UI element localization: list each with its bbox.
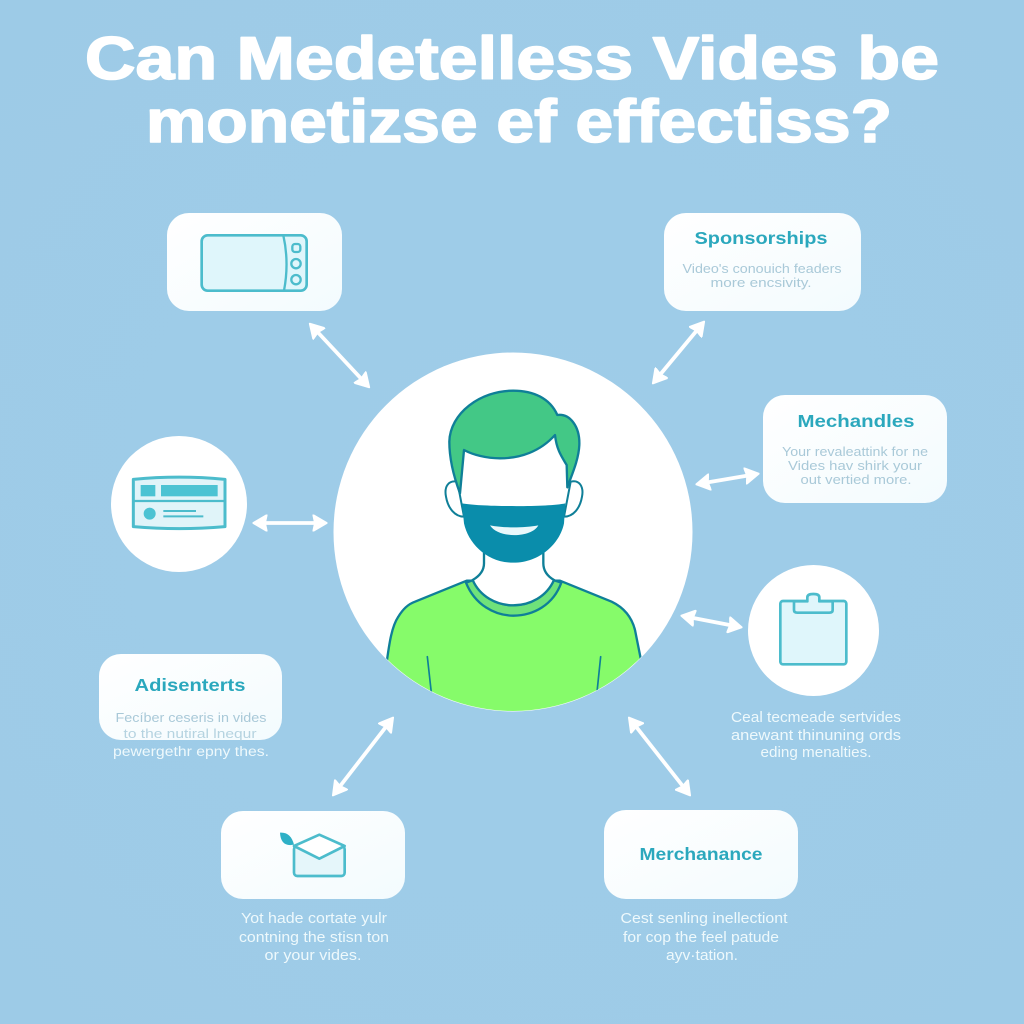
panel: envelope card (221, 811, 405, 899)
text: envelope caption: or your vides. (264, 948, 362, 964)
panel: adisenterts card (99, 654, 282, 759)
infographic canvas (86, 34, 947, 963)
arrow: right upper (698, 474, 757, 484)
text: merchanance caption: ayv·tation. (666, 948, 738, 964)
arrow: bottom-right (630, 719, 689, 794)
text: adisenterts description: pewergethr epny thes. (113, 744, 269, 759)
text: mechandles description: Vides hav shirk your (788, 458, 923, 473)
text: adisenterts description (113, 710, 269, 759)
heading: sponsorships: Sponsorships (694, 228, 828, 248)
heading: mechandles: Mechandles (798, 411, 915, 431)
panel: merchanance card (604, 810, 798, 899)
ears (446, 481, 464, 517)
text: sponsorships description: more encsivity. (710, 275, 812, 290)
shirt (386, 579, 642, 711)
text: envelope caption: contning the stisn ton (239, 930, 389, 946)
panel: card icon circle (111, 436, 247, 572)
smile (490, 525, 538, 535)
text: sponsorships description (682, 261, 842, 290)
text: mechandles description: Your revaleattink for ne (782, 444, 928, 459)
text: sponsorships description: Video's conouich feaders (682, 261, 842, 276)
text: envelope caption: Yot hade cortate yulr (241, 911, 387, 927)
panel: mechandles card (763, 395, 947, 503)
text: merchanance caption: Cest senling inellectiont (620, 911, 788, 927)
hair (449, 391, 579, 493)
arrow: left (255, 521, 325, 525)
panel: sponsorships card (664, 213, 861, 311)
text: clipboard caption: eding menalties. (760, 745, 872, 761)
icon: clipboard (780, 594, 846, 664)
person illustration (367, 391, 660, 750)
icon: web card (133, 477, 225, 529)
text: mechandles description: out vertied more. (800, 472, 912, 487)
panel: clipboard circle (748, 565, 879, 696)
text: mechandles description (782, 444, 928, 487)
text: clipboard caption: anewant thinuning ords (731, 728, 901, 744)
central avatar circle (334, 352, 692, 750)
heading: merchanance: Merchanance (640, 844, 763, 864)
beard (462, 503, 565, 563)
heading: adisenterts: Adisenterts (134, 675, 246, 695)
panel: TV card (167, 213, 342, 311)
arrow: top-left (311, 325, 368, 386)
arrow: top-right (654, 323, 703, 382)
text: envelope caption (239, 911, 389, 964)
text: adisenterts description: to the nutiral lnequr (124, 726, 257, 741)
text: clipboard caption (731, 710, 901, 761)
icon: envelope with leaf (280, 833, 345, 876)
title: monetizse ef effectiss? (146, 88, 892, 155)
text: clipboard caption: Ceal tecmeade sertvides (731, 710, 901, 726)
icon: TV (202, 235, 307, 291)
text: merchanance caption (620, 911, 788, 964)
arrow: right lower (683, 616, 740, 627)
text: merchanance caption: for cop the feel patude (623, 930, 779, 946)
arrow: bottom-left (334, 719, 392, 794)
title (85, 25, 939, 155)
title: Can Medetelless Vides be (85, 25, 939, 92)
text: adisenterts description: Fecíber ceseris in vides (116, 710, 267, 725)
neck (473, 547, 554, 605)
